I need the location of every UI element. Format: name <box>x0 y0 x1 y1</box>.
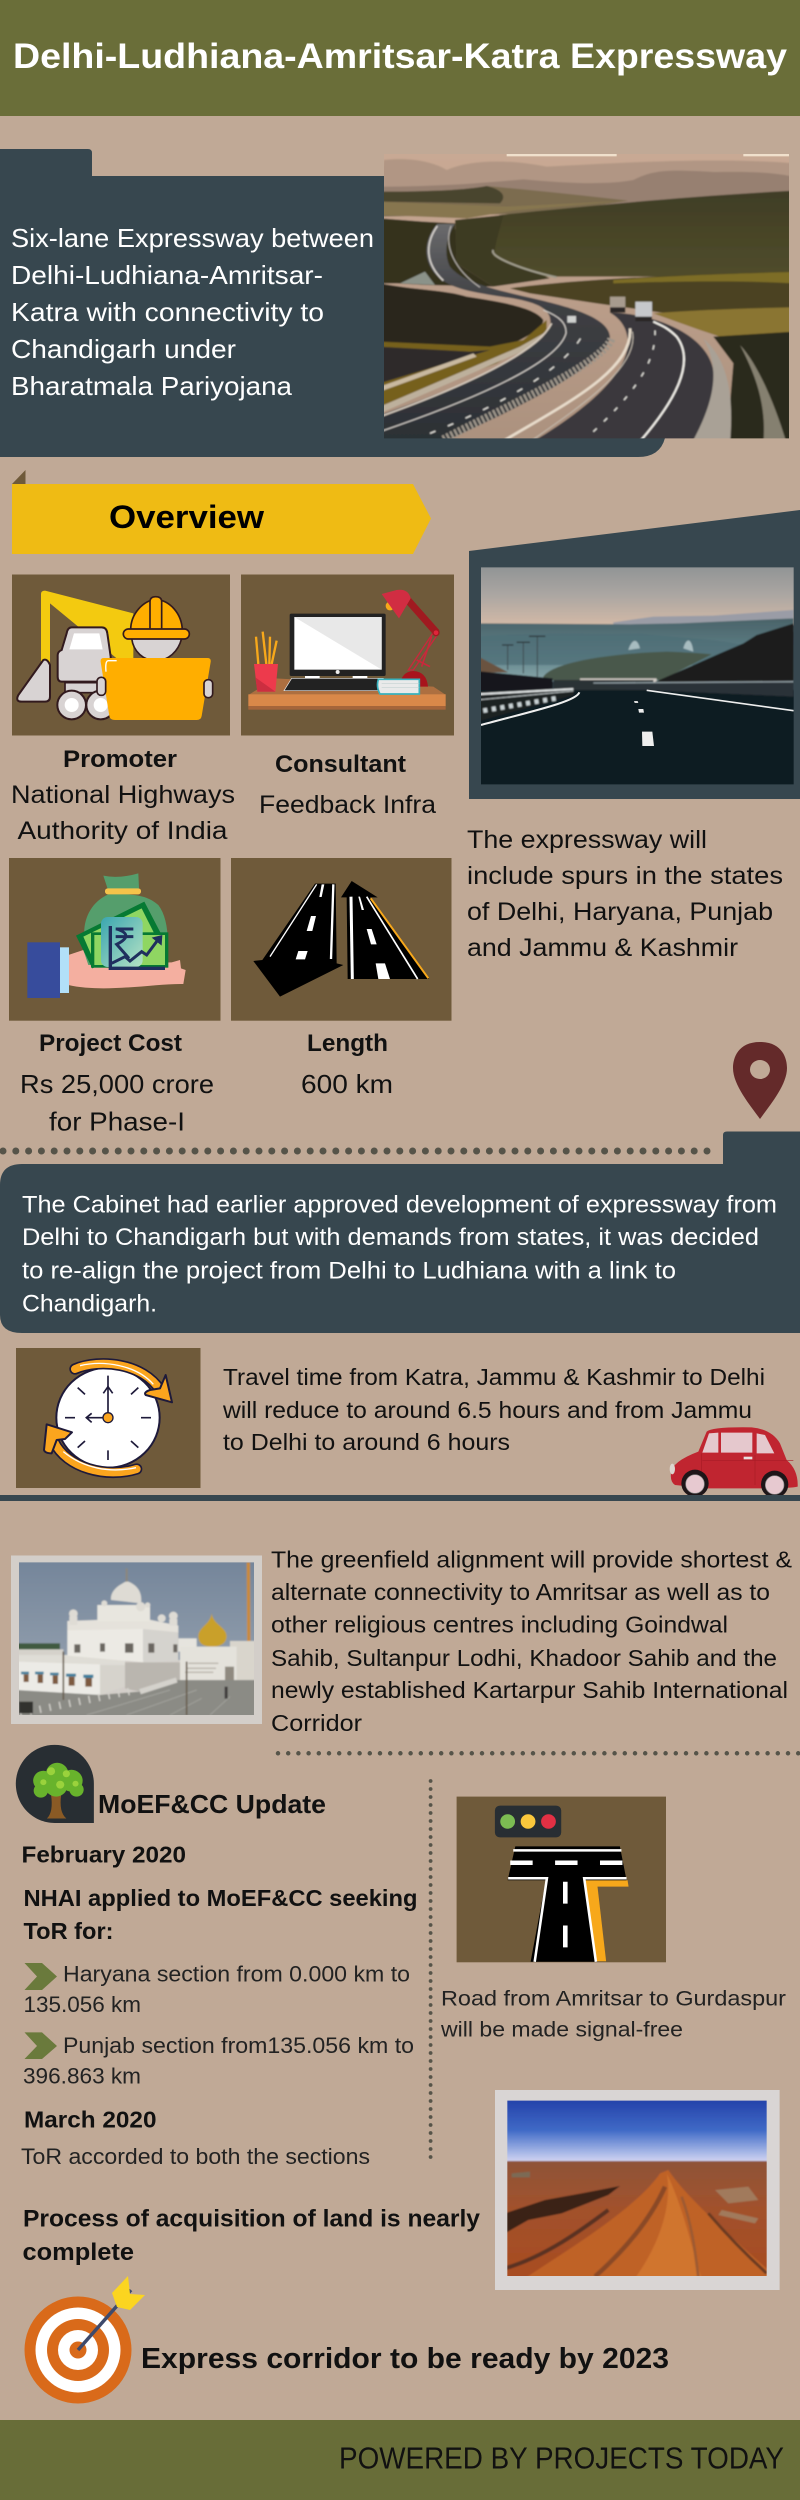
promoter label: National Highways <box>11 781 235 809</box>
text: greenfield: newly established Kartarpur Sahib International <box>271 1677 788 1703</box>
MoEF&CC timeline: 135.056 km <box>24 1992 141 2017</box>
promoter label: Promoter <box>63 746 177 773</box>
text: land acquisition <box>22 2206 481 2266</box>
text: signal-free <box>440 1987 786 2041</box>
text: travel time <box>222 1364 765 1455</box>
bullet chevron: Punjab <box>24 2032 57 2059</box>
cabinet text: Delhi to Chandigarh but with demands from states, it was decided <box>22 1224 759 1251</box>
consultant label: Feedback Infra <box>259 791 436 819</box>
MoEF&CC timeline: ToR for: <box>24 1918 114 1944</box>
photo: winding highway through hills <box>380 150 793 443</box>
text: travel time: will reduce to around 6.5 hours and from Jammu <box>222 1397 752 1423</box>
photo: gurdwara <box>11 1556 262 1724</box>
panel: road photo frame <box>469 510 800 799</box>
intro text: Chandigarh under <box>11 334 236 364</box>
text: signal-free: Road from Amritsar to Gurdaspur <box>441 1987 786 2011</box>
header band <box>0 0 800 116</box>
footer band <box>0 2420 800 2500</box>
title: Delhi-Ludhiana-Amritsar-Katra Expressway <box>13 37 788 76</box>
text: greenfield: alternate connectivity to Amritsar as well as to <box>271 1579 770 1605</box>
cabinet text: Chandigarh. <box>22 1290 157 1317</box>
bullet chevron: Haryana <box>24 1963 57 1990</box>
promoter label: Authority of India <box>18 817 228 845</box>
right carriageway <box>530 313 714 443</box>
intro text: Bharatmala Pariyojana <box>11 371 293 401</box>
MoEF&CC timeline <box>21 1841 418 2169</box>
text: travel time: to Delhi to around 6 hours <box>223 1429 510 1455</box>
trucks <box>567 297 652 323</box>
intro text: Delhi-Ludhiana-Amritsar- <box>11 260 323 290</box>
length label <box>301 1030 393 1099</box>
icon: signal-free road <box>457 1797 666 1962</box>
cabinet text: The Cabinet had earlier approved development of expressway from <box>22 1191 777 1218</box>
cabinet text: to re-align the project from Delhi to Ludhiana with a link to <box>22 1258 676 1284</box>
MoEF&CC timeline: ToR accorded to both the sections <box>21 2144 370 2169</box>
MoEF&CC timeline: 396.863 km <box>23 2064 141 2089</box>
panel: intro <box>0 149 665 457</box>
overview banner <box>12 470 431 554</box>
text: land acquisition: Process of acquisition of land is nearly <box>23 2206 481 2232</box>
MoEF&CC timeline: Haryana section from 0.000 km to <box>63 1962 410 1987</box>
icon: target with arrow <box>24 2276 145 2404</box>
length label: 600 km <box>301 1069 393 1099</box>
icon: tree badge <box>16 1745 94 1823</box>
MoEF&CC timeline: February 2020 <box>22 1841 186 1867</box>
text: spurs: and Jammu & Kashmir <box>467 934 738 962</box>
icon: project cost money bag <box>9 858 220 1021</box>
left carriageway <box>380 224 610 443</box>
text: spurs <box>467 826 783 962</box>
text: signal-free: will be made signal-free <box>440 2017 683 2041</box>
text: spurs: of Delhi, Haryana, Punjab <box>467 898 773 926</box>
text: spurs: include spurs in the states <box>467 862 783 890</box>
text: greenfield: Corridor <box>271 1710 362 1736</box>
promoter label <box>11 746 235 845</box>
intro text: Katra with connectivity to <box>11 297 324 327</box>
text: greenfield: The greenfield alignment will provide shortest & <box>271 1546 792 1572</box>
icon: clock <box>16 1348 200 1488</box>
icon: location pin <box>733 1042 787 1119</box>
text: travel time: Travel time from Katra, Jammu & Kashmir to Delhi <box>223 1364 765 1390</box>
text: land acquisition: complete <box>22 2239 134 2266</box>
project cost label: for Phase-I <box>49 1106 185 1136</box>
photo: desert dirt road <box>495 2090 780 2290</box>
MoEF&CC timeline: NHAI applied to MoEF&CC seeking <box>24 1885 418 1911</box>
photo: misty highway <box>477 565 800 788</box>
icon: consultant desk <box>241 574 454 736</box>
MoEF&CC timeline: Punjab section from135.056 km to <box>63 2033 414 2058</box>
consultant label <box>259 751 436 819</box>
text: greenfield <box>271 1546 792 1736</box>
intro text: Six-lane Expressway between <box>11 223 374 253</box>
icon: red car <box>670 1427 798 1498</box>
overview heading: Overview <box>109 499 264 535</box>
text: spurs: The expressway will <box>467 826 707 854</box>
icon: length road arrows <box>231 858 452 1021</box>
project cost label: Project Cost <box>39 1030 182 1057</box>
panel: cabinet <box>0 1132 800 1333</box>
icon: promoter excavator and engineer <box>12 574 230 736</box>
length label: Length <box>307 1030 388 1057</box>
text: greenfield: Sahib, Sultanpur Lodhi, Khadoor Sahib and the <box>271 1645 777 1671</box>
text: ready by 2023: Express corridor to be ready by 2023 <box>141 2343 669 2375</box>
MoEF&CC timeline: March 2020 <box>24 2106 156 2132</box>
project cost label: Rs 25,000 crore <box>20 1069 214 1099</box>
intro text <box>11 223 374 401</box>
heading: MoEF&CC update: MoEF&CC Update <box>98 1789 326 1819</box>
cabinet text <box>22 1191 777 1317</box>
text: greenfield: other religious centres including Goindwal <box>271 1612 728 1638</box>
consultant label: Consultant <box>275 751 406 778</box>
project cost label <box>20 1030 214 1136</box>
